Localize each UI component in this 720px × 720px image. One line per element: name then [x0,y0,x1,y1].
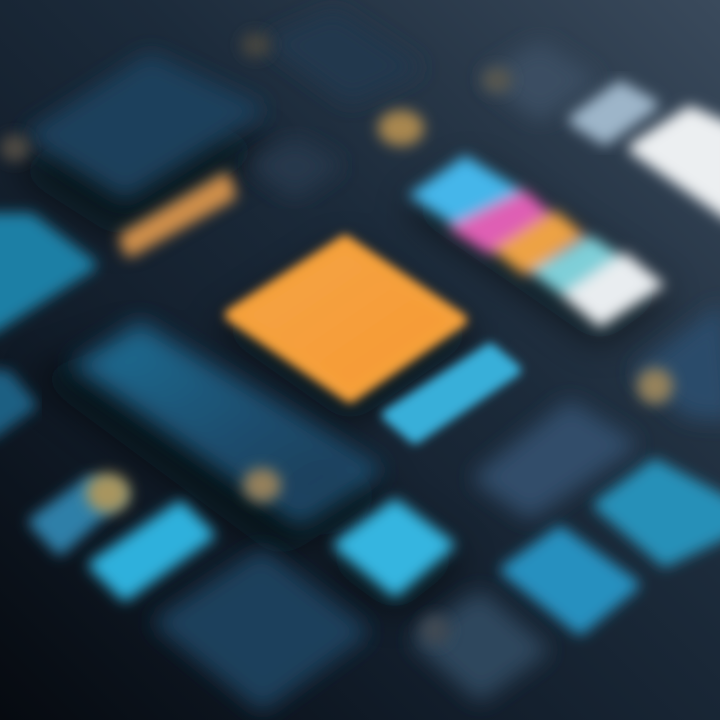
dot: top [241,32,271,58]
dot: top right [482,67,512,93]
panel: top centre dark tile [272,15,415,98]
panel: top right dark tile [490,47,590,115]
shadows under tiles [10,90,670,615]
button: orange pill [125,179,230,251]
dot: right [637,368,673,404]
dot: centre lower [243,468,281,502]
icons: small blurred dots [0,32,673,645]
dot: bottom [420,615,450,645]
strip segment: pink [448,190,550,255]
panel: lower centre dark tile [480,407,630,513]
panel: left teal tile [0,219,90,329]
strip segment: teal [530,235,625,298]
panel: central orange tile [232,242,460,396]
panel: right dark tile [640,312,720,414]
panel: bottom dark tile [160,555,362,705]
strip segment: orange [492,210,585,276]
panel: multicolour strip [408,155,665,328]
panel: top right white tile [635,112,720,215]
panel: bottom left blue tile [35,482,120,549]
button: lower blue tile [507,532,633,629]
panel: wide blue tile [78,325,375,518]
button: right blue tile [600,465,720,561]
panel: left edge tile [0,376,30,434]
panel: upper middle dark tile [255,142,335,193]
button: blue pill below orange tile [388,349,515,438]
panel: top right pale blue tile [575,87,652,139]
button: bottom left cyan pill [95,507,208,595]
dot: bottom left [86,473,130,513]
dot: far left [0,134,30,162]
panel: top left dark tile [32,59,258,193]
panel: bottom right dark tile [418,597,542,695]
dot: upper orange [378,110,424,146]
button: centre cyan tile [340,505,448,591]
strip segment: blue [408,155,535,238]
strip segment: white [562,252,665,328]
